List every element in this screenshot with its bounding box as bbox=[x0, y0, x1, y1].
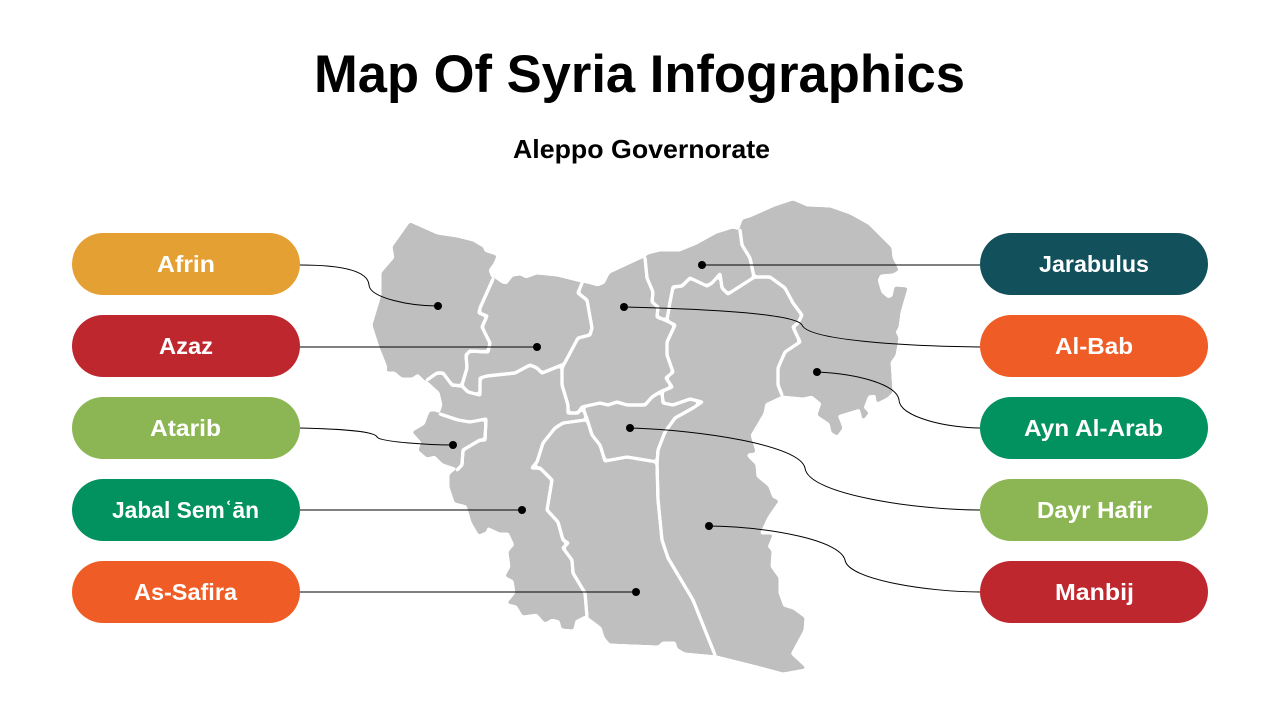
district borders bbox=[427, 230, 802, 655]
location dots bbox=[434, 261, 821, 596]
label: Jabal Sem'an bbox=[72, 479, 300, 541]
label: As-Safira bbox=[72, 561, 300, 623]
label: Al-Bab bbox=[980, 315, 1208, 377]
label: Jarabulus: Jarabulus bbox=[1039, 251, 1149, 277]
label: Manbij bbox=[980, 561, 1208, 623]
label: Afrin bbox=[72, 233, 300, 295]
label: Atarib: Atarib bbox=[150, 415, 221, 441]
map: Aleppo Governorate bbox=[373, 201, 907, 672]
subtitle: Aleppo Governorate bbox=[513, 134, 770, 164]
label: Manbij: Manbij bbox=[1055, 579, 1134, 605]
label: Jabal Sem'an: Jabal Semʿān bbox=[112, 497, 259, 523]
label: Dayr Hafir bbox=[980, 479, 1208, 541]
label: Atarib bbox=[72, 397, 300, 459]
title: Map Of Syria Infographics bbox=[314, 45, 965, 104]
label: Ayn Al-Arab: Ayn Al-Arab bbox=[1024, 415, 1163, 441]
label: Ayn Al-Arab bbox=[980, 397, 1208, 459]
label: Azaz bbox=[72, 315, 300, 377]
label: Al-Bab: Al-Bab bbox=[1055, 333, 1133, 359]
label: Dayr Hafir: Dayr Hafir bbox=[1037, 497, 1152, 523]
connector lines bbox=[300, 265, 980, 592]
label: Jarabulus bbox=[980, 233, 1208, 295]
label: Azaz: Azaz bbox=[159, 333, 213, 359]
label: Afrin: Afrin bbox=[157, 251, 215, 277]
label: As-Safira: As-Safira bbox=[134, 579, 237, 605]
map silhouette bbox=[373, 201, 907, 672]
